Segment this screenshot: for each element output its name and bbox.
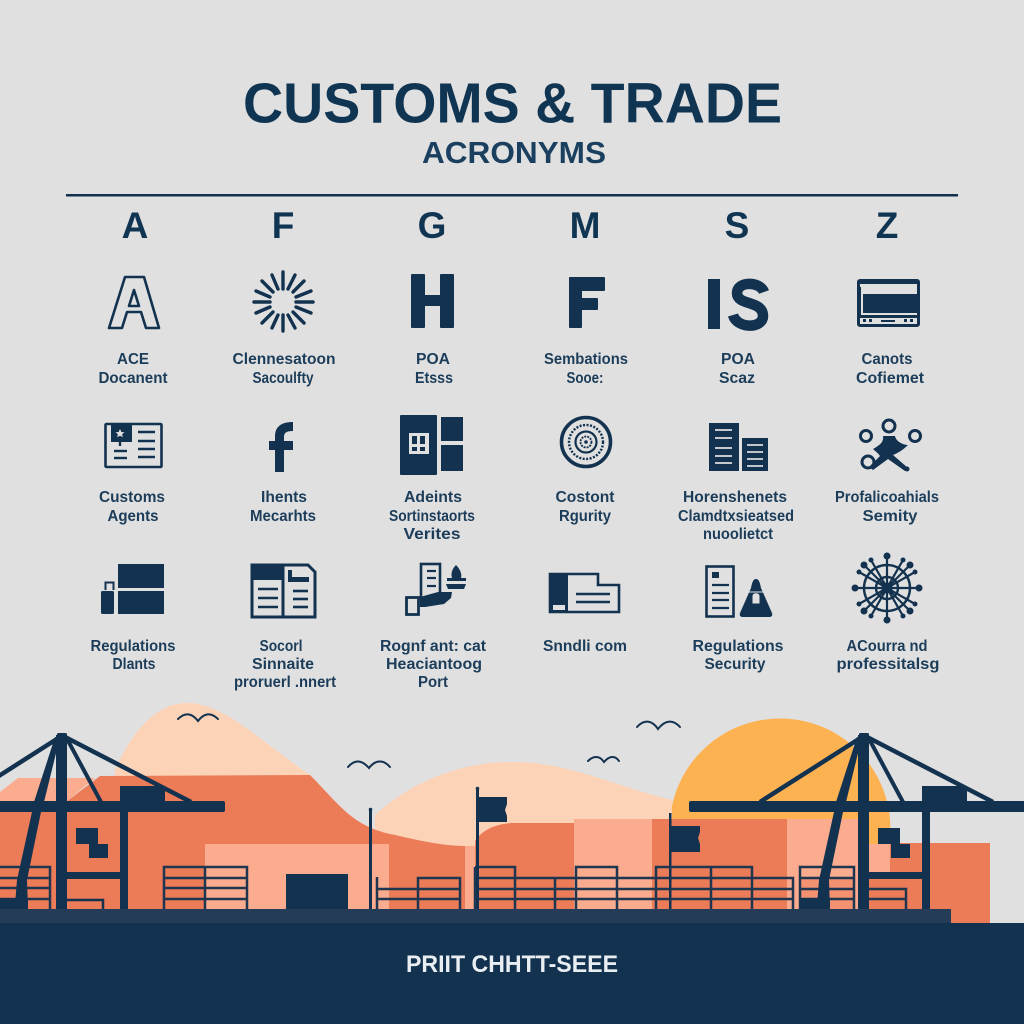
label: Costont Rgurity: [556, 489, 614, 525]
label: Rognf ant cat Heaciantoog Port: Rognf ant: cat: [380, 638, 486, 655]
icon: compass wheel: [852, 552, 922, 624]
label: Horenshenets Clamdtxsieatsed nuoolietct: nuoolietct: [703, 526, 773, 543]
birds: [178, 714, 680, 768]
label: Profalicoahials Semity: Profalicoahials: [835, 489, 939, 506]
label: Profalicoahials Semity: [835, 489, 939, 525]
icon: figure with gears: [860, 420, 920, 472]
icon: hand holding document: [406, 564, 466, 614]
icon: briefcase blocks: [101, 564, 164, 614]
label: Adeints Sortinstaorts Verites: Sortinstaorts: [389, 508, 475, 525]
icon: letter H: [411, 274, 454, 328]
label: Socorl Sinnaite proruerl nnert: [234, 638, 336, 691]
port scene background: [0, 703, 990, 940]
label: ACE Docanent: [98, 351, 168, 387]
icon: letters IS: [708, 279, 764, 329]
icon: letter F: [569, 277, 605, 328]
alphabet headings: A: [122, 205, 148, 246]
alphabet headings: F: [272, 205, 294, 246]
label: Clennesatoon Sacoulfty: [232, 351, 336, 387]
label: POA Scaz: POA: [721, 351, 755, 368]
subtitle: ACRONYMS: [422, 135, 606, 170]
sun: [670, 718, 890, 940]
label: Rognf ant cat Heaciantoog Port: [380, 638, 486, 691]
label: Profalicoahials Semity: Semity: [862, 508, 918, 525]
icon: open book: [251, 564, 315, 618]
label: ACourra nd professitalsg: [836, 638, 940, 673]
icon: document and cone: [706, 566, 772, 617]
icon: concentric target: [562, 418, 610, 466]
alphabet headings: Z: [876, 205, 898, 246]
label: Clennesatoon Sacoulfty: Sacoulfty: [252, 370, 314, 387]
alphabet headings: G: [418, 205, 446, 246]
peach hills: [115, 703, 672, 860]
label: Regulations Security: Security: [704, 656, 766, 673]
label: Regulations Dlants: Regulations: [90, 638, 176, 655]
footer text: PRIIT CHHTT-SEEE: [406, 951, 618, 978]
label: Sembations Sooe: [544, 351, 628, 387]
label: Clennesatoon Sacoulfty: Clennesatoon: [232, 351, 336, 368]
label: Costont Rgurity: Costont: [556, 489, 614, 506]
icon: control panel: [858, 280, 919, 326]
label: Horenshenets Clamdtxsieatsed nuoolietct: Horenshenets: [683, 489, 787, 506]
icon: letter f: [269, 422, 293, 472]
crane: right: [689, 733, 1024, 909]
icon: ID card with flag: [106, 424, 162, 467]
label: Customs Agents: [99, 489, 165, 525]
flags: [369, 787, 700, 909]
label: Socorl Sinnaite proruerl nnert: proruerl .nnert: [234, 674, 336, 691]
label: Adeints Sortinstaorts Verites: Verites: [404, 526, 460, 543]
label: Sembations Sooe: Sembations: [544, 351, 628, 368]
label: Socorl Sinnaite proruerl nnert: Socorl: [260, 638, 302, 655]
label: Canots Cofiemet: Cofiemet: [856, 370, 924, 387]
icon: outlined letter A: [109, 277, 159, 328]
label: Regulations Dlants: Dlants: [112, 656, 156, 673]
label: Snndli com: Snndli com: [543, 638, 627, 655]
label: POA Scaz: [719, 351, 755, 387]
label: Customs Agents: Customs: [99, 489, 165, 506]
label: Adeints Sortinstaorts Verites: [389, 489, 475, 543]
icon: building blocks: [400, 415, 463, 475]
label: ACE Docanent: ACE: [117, 351, 149, 368]
alphabet headings: [122, 205, 898, 246]
warehouses: [0, 778, 95, 802]
label: Canots Cofiemet: [856, 351, 924, 387]
icon: radiating sun: [254, 272, 313, 331]
label: Rognf ant cat Heaciantoog Port: Port: [418, 674, 448, 691]
label: Ihents Mecarhts: Ihents: [261, 489, 307, 506]
alphabet headings: M: [570, 205, 600, 246]
label: Costont Rgurity: Rgurity: [559, 508, 611, 525]
title: CUSTOMS & TRADE: [243, 72, 782, 136]
label: POA Etsss: [415, 351, 453, 387]
label: Regulations Security: [692, 638, 784, 673]
icon: document stacks: [709, 423, 768, 471]
label: POA Etsss: Etsss: [415, 370, 453, 387]
footer band: [0, 923, 1024, 1024]
label: Regulations Security: Regulations: [692, 638, 784, 655]
label: Canots Cofiemet: Canots: [862, 351, 912, 368]
label: Horenshenets Clamdtxsieatsed nuoolietct: [678, 489, 794, 543]
label: ACE Docanent: Docanent: [98, 370, 168, 387]
label: Ihents Mecarhts: [250, 489, 316, 525]
crane: left: [0, 733, 225, 909]
fences: [0, 867, 906, 909]
icon: folder card: [550, 574, 619, 612]
label: ACourra nd professitalsg: professitalsg: [836, 656, 940, 673]
alphabet headings: S: [725, 205, 749, 246]
ground strip: [0, 909, 951, 923]
label: Ihents Mecarhts: Mecarhts: [250, 508, 316, 525]
label: Socorl Sinnaite proruerl nnert: Sinnaite: [252, 656, 314, 673]
label: POA Scaz: Scaz: [719, 370, 755, 387]
label: Sembations Sooe: Sooe:: [566, 370, 604, 387]
label: Horenshenets Clamdtxsieatsed nuoolietct: Clamdtxsieatsed: [678, 508, 794, 525]
label: Adeints Sortinstaorts Verites: Adeints: [404, 489, 462, 506]
label: ACourra nd professitalsg: ACourra nd: [846, 638, 928, 655]
label: Regulations Dlants: [90, 638, 176, 673]
label: Customs Agents: Agents: [108, 508, 158, 525]
label: POA Etsss: POA: [416, 351, 450, 368]
label: Rognf ant cat Heaciantoog Port: Heaciantoog: [386, 656, 482, 673]
